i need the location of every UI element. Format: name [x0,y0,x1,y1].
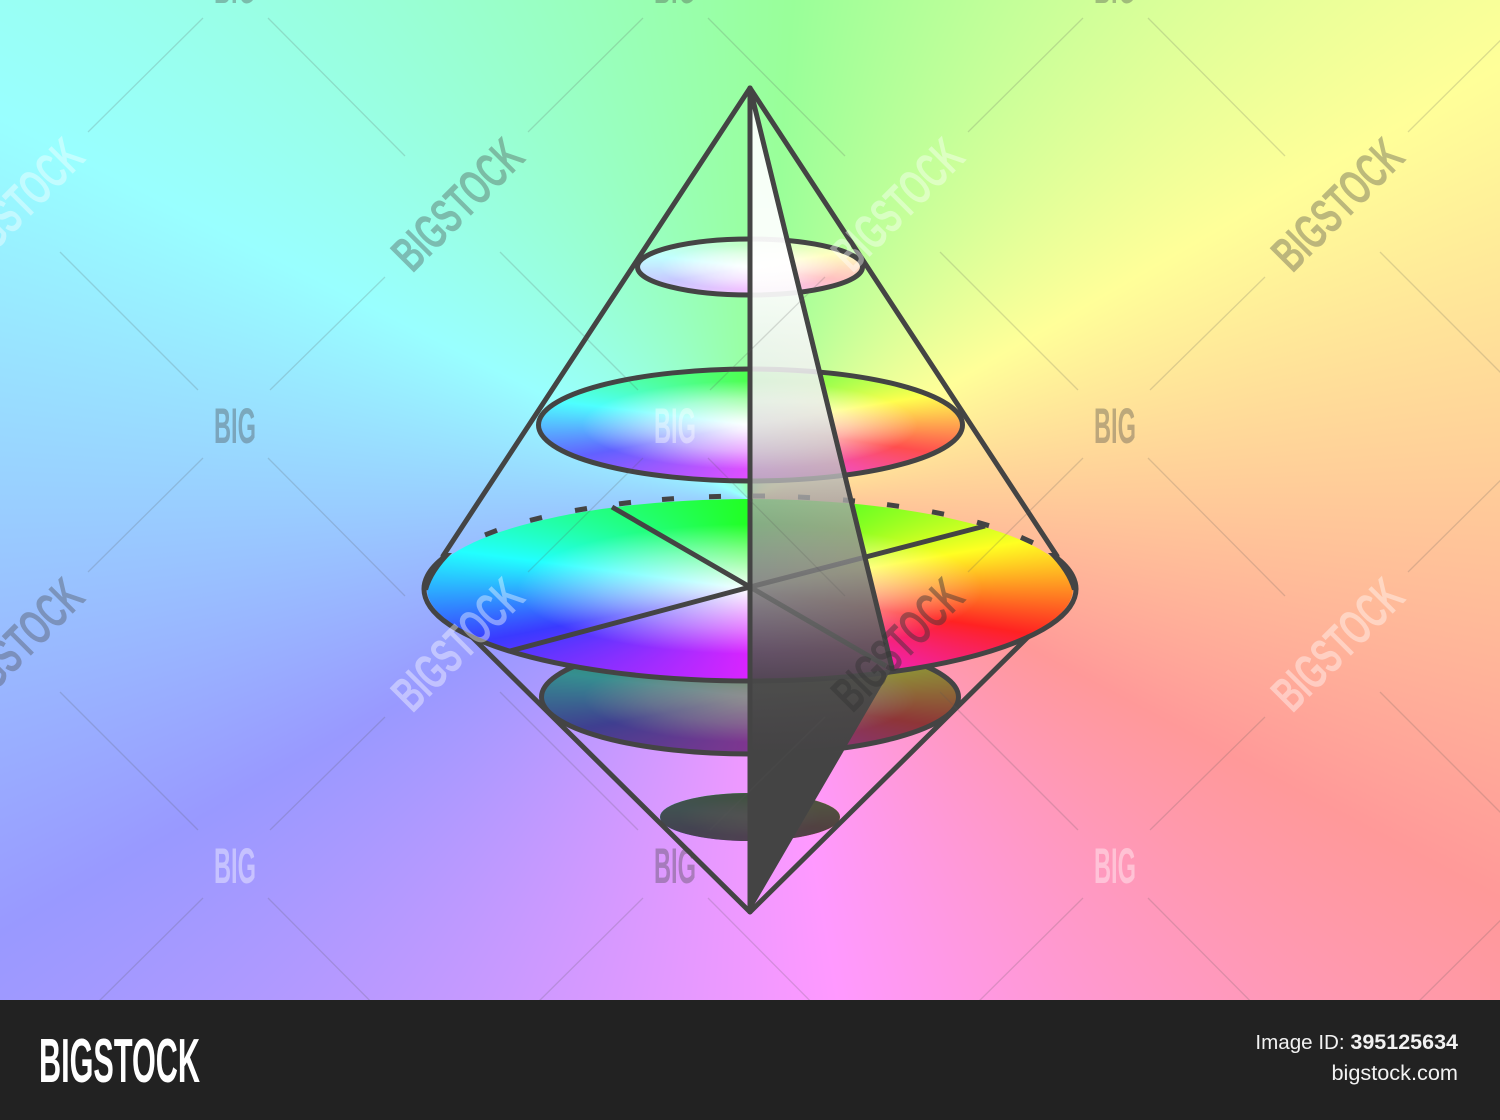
watermark words: BIGSTOCK [1261,568,1415,722]
disc: bottom nearly black slice [660,793,840,841]
grey value wedge [750,88,892,912]
watermark words: BIG [654,838,696,894]
watermark words: BIG [654,398,696,454]
outline: top slice [638,239,862,295]
watermark words: BIGSTOCK [1261,128,1415,282]
watermark words: BIGSTOCK [381,128,535,282]
disc: top pale slice [638,239,862,295]
watermark words: BIGSTOCK [821,128,975,282]
footer bar [0,1000,1500,1120]
crescent: right rim of main slice [1048,553,1077,591]
wedge edge and central axis [750,88,892,912]
disc: lower dark slice [542,641,958,753]
spokes dividing main slice [510,507,985,666]
watermark words [0,0,1415,894]
disc: main full-saturation slice [427,499,1073,679]
watermark words: BIGSTOCK [381,568,535,722]
site address: bigstock.com [1331,1060,1458,1085]
image id: Image ID: 395125634 [1255,1030,1458,1054]
watermark words: BIGSTOCK [821,568,975,722]
dashed back rim of main slice [485,496,1033,543]
outline: upper slice [538,369,962,481]
outline: main slice front rim [424,556,1076,681]
cone edges [443,88,1057,912]
crescent: left rim of main slice [423,553,452,591]
watermark words: BIG [1094,838,1136,894]
watermark words: BIG [1094,398,1136,454]
watermark words: BIG [214,838,256,894]
watermark words: BIG [214,398,256,454]
disc: upper bright slice [540,370,960,480]
